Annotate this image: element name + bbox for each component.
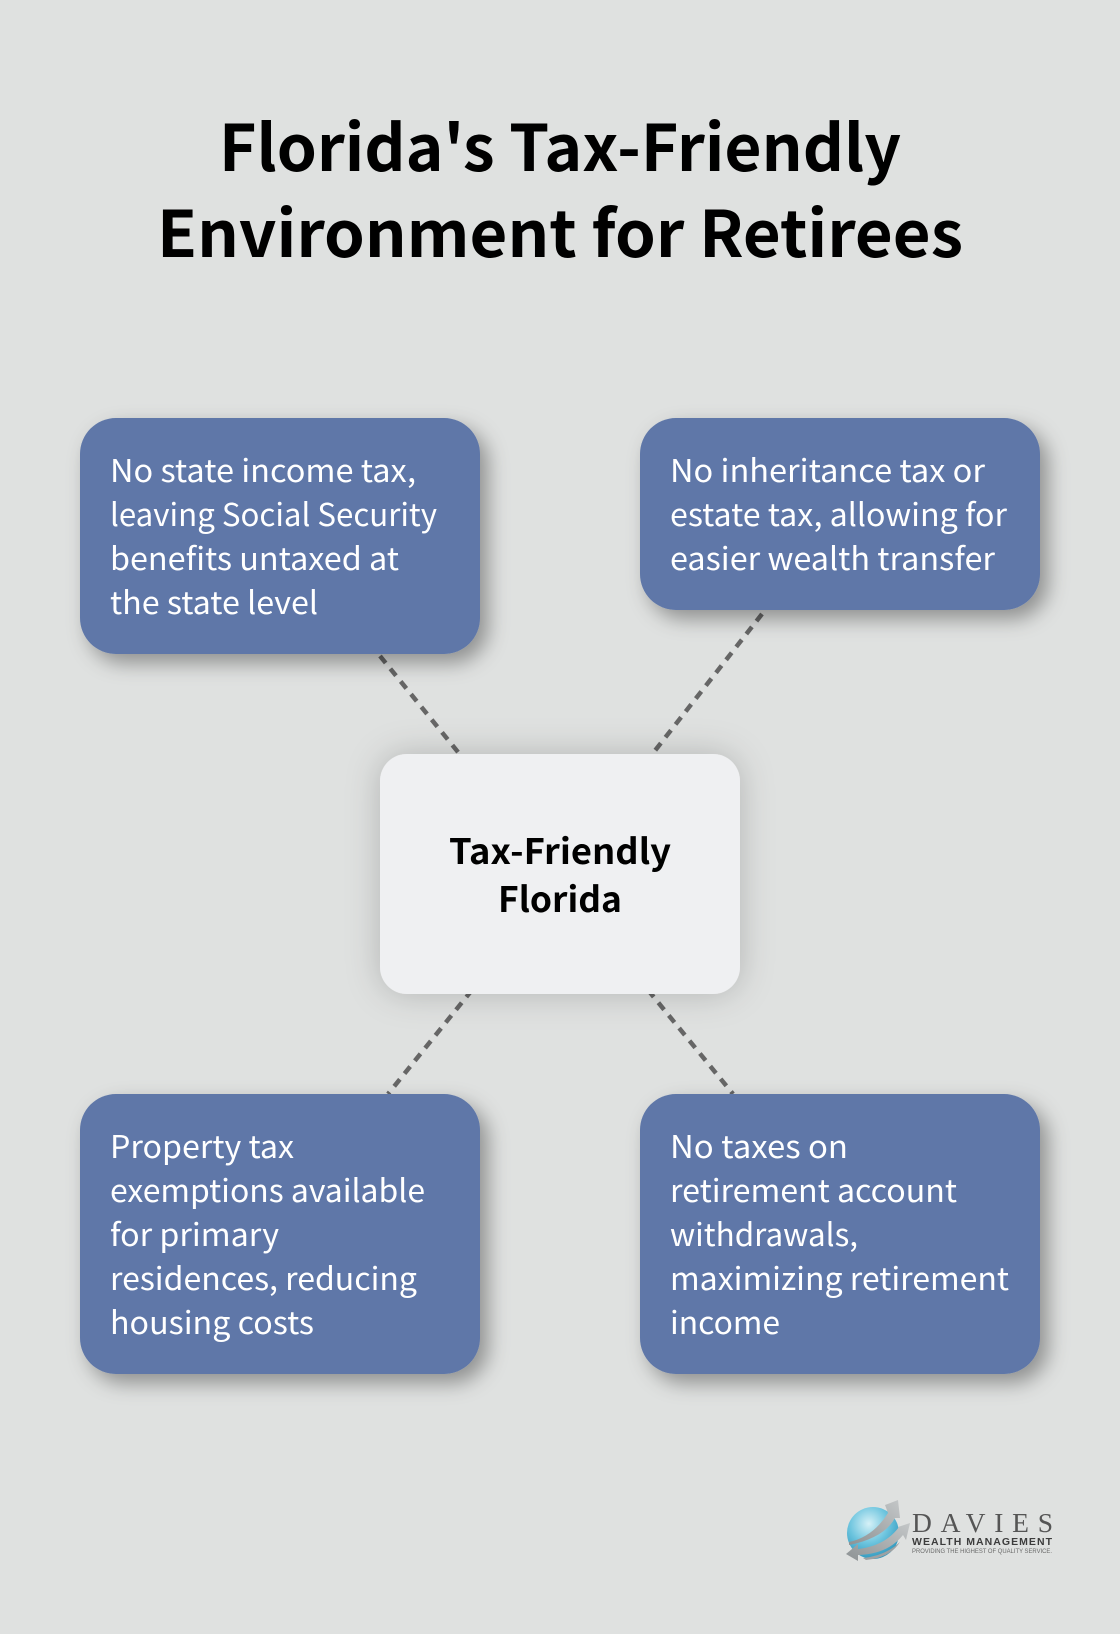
icon: globe with arrows xyxy=(846,1500,910,1561)
panel: no inheritance tax: No inheritance tax or xyxy=(670,446,986,492)
panel: property tax exemptions xyxy=(80,1094,480,1374)
title: Environment for Retirees xyxy=(157,184,963,276)
panel: no state income tax: leaving Social Security xyxy=(110,490,437,536)
panel: no inheritance tax xyxy=(640,418,1040,610)
panel: property tax exemptions: for primary xyxy=(110,1210,279,1256)
logo: Davies Wealth Management xyxy=(846,1500,1053,1561)
panel: no state income tax: the state level xyxy=(110,578,318,624)
logo wordmark: DAVIES xyxy=(912,1507,1053,1538)
panel: no state income tax: No state income tax, xyxy=(110,446,416,492)
panel: no taxes on retirement withdrawals: maximizing retirement xyxy=(670,1254,1009,1300)
title xyxy=(157,98,963,276)
panel: central hub: Florida xyxy=(498,872,622,923)
panel: property tax exemptions: housing costs xyxy=(110,1298,314,1344)
panel: no taxes on retirement withdrawals xyxy=(640,1094,1040,1374)
logo subtitle: WEALTH MANAGEMENT xyxy=(912,1536,1053,1548)
panel: no state income tax: benefits untaxed at xyxy=(110,534,399,580)
panel: property tax exemptions: residences, reducing xyxy=(110,1254,417,1300)
panel: no taxes on retirement withdrawals: income xyxy=(670,1298,780,1344)
panel: property tax exemptions: Property tax xyxy=(110,1122,294,1168)
panel: no inheritance tax: easier wealth transfer xyxy=(670,534,996,580)
panel: central hub: Tax-Friendly xyxy=(449,824,671,875)
title: Florida's Tax-Friendly xyxy=(219,98,901,190)
panel: no inheritance tax: estate tax, allowing for xyxy=(670,490,1008,536)
panel: no taxes on retirement withdrawals: No taxes on xyxy=(670,1122,848,1168)
panel: no taxes on retirement withdrawals: withdrawals, xyxy=(670,1210,858,1256)
panel: central hub xyxy=(380,754,740,994)
connector: dashed lines from hub to panels xyxy=(380,614,762,1094)
panel: no taxes on retirement withdrawals: retirement account xyxy=(670,1166,957,1212)
logo tagline: PROVIDING THE HIGHEST OF QUALITY SERVICE. xyxy=(912,1548,1052,1555)
panel: no state income tax xyxy=(80,418,480,654)
panel: property tax exemptions: exemptions available xyxy=(110,1166,425,1212)
